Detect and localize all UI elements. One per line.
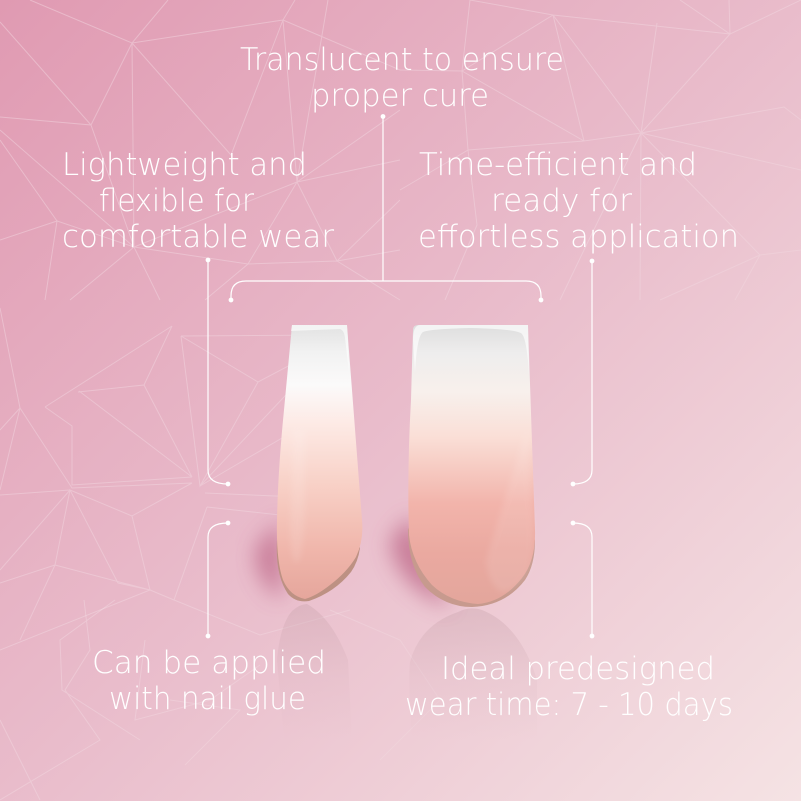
- connector: upper right: [571, 259, 594, 486]
- shadow: right nail: [390, 515, 450, 608]
- text: lightweight: Lightweight and: [62, 147, 307, 183]
- text: wear time: Ideal predesigned: [441, 651, 715, 687]
- shadow: left nail: [256, 520, 282, 600]
- text: time-efficient: effortless application: [418, 219, 739, 255]
- nail: right: [408, 325, 535, 607]
- text: translucent: proper cure: [311, 78, 489, 114]
- nail: left: [277, 325, 362, 601]
- connector: top centre bracket: [229, 115, 543, 302]
- reflection: left nail: [277, 604, 352, 740]
- text: translucent: [240, 42, 564, 114]
- text: lightweight: comfortable wear: [62, 219, 334, 255]
- connector: lower left: [206, 521, 230, 638]
- text: nail glue: [92, 645, 326, 717]
- connector: lower right: [571, 521, 594, 638]
- text: translucent: Translucent to ensure: [240, 42, 564, 78]
- text: lightweight: flexible for: [99, 183, 254, 219]
- connector: upper left: [206, 258, 230, 486]
- text: time-efficient: Time-efficient and: [419, 147, 697, 183]
- reflection: right nail: [409, 608, 537, 740]
- text: wear time: wear time: 7 - 10 days: [405, 687, 733, 723]
- text: lightweight: [62, 147, 334, 255]
- text: nail glue: with nail glue: [109, 681, 306, 717]
- text: time-efficient: [418, 147, 739, 255]
- text: wear time: [405, 651, 733, 723]
- text: nail glue: Can be applied: [92, 645, 326, 681]
- text: time-efficient: ready for: [491, 183, 632, 219]
